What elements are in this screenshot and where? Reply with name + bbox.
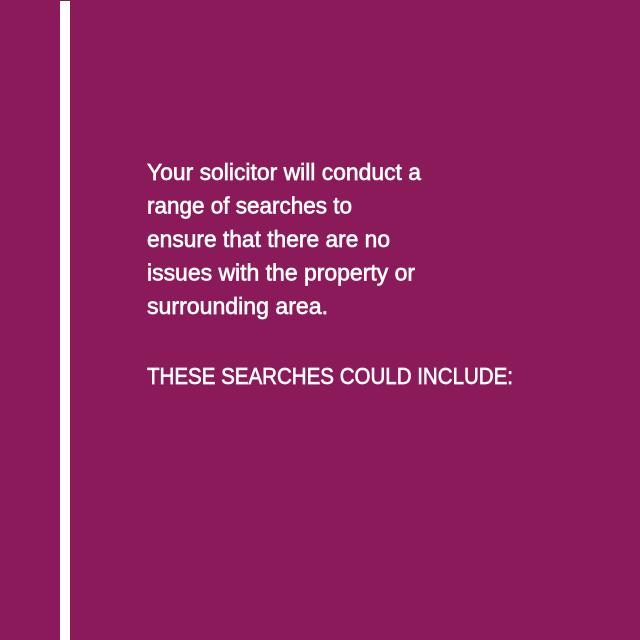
intro text block: surrounding area.: [147, 293, 328, 319]
intro text block: ensure that there are no: [147, 226, 390, 252]
intro text block: range of searches to: [147, 192, 352, 218]
intro text block: issues with the property or: [147, 260, 415, 286]
intro text block: [147, 159, 421, 319]
vertical white bar: [60, 1, 70, 640]
heading: these searches could include: THESE SEARCHES COULD INCLUDE:: [147, 363, 513, 389]
intro text block: Your solicitor will conduct a: [147, 159, 421, 185]
